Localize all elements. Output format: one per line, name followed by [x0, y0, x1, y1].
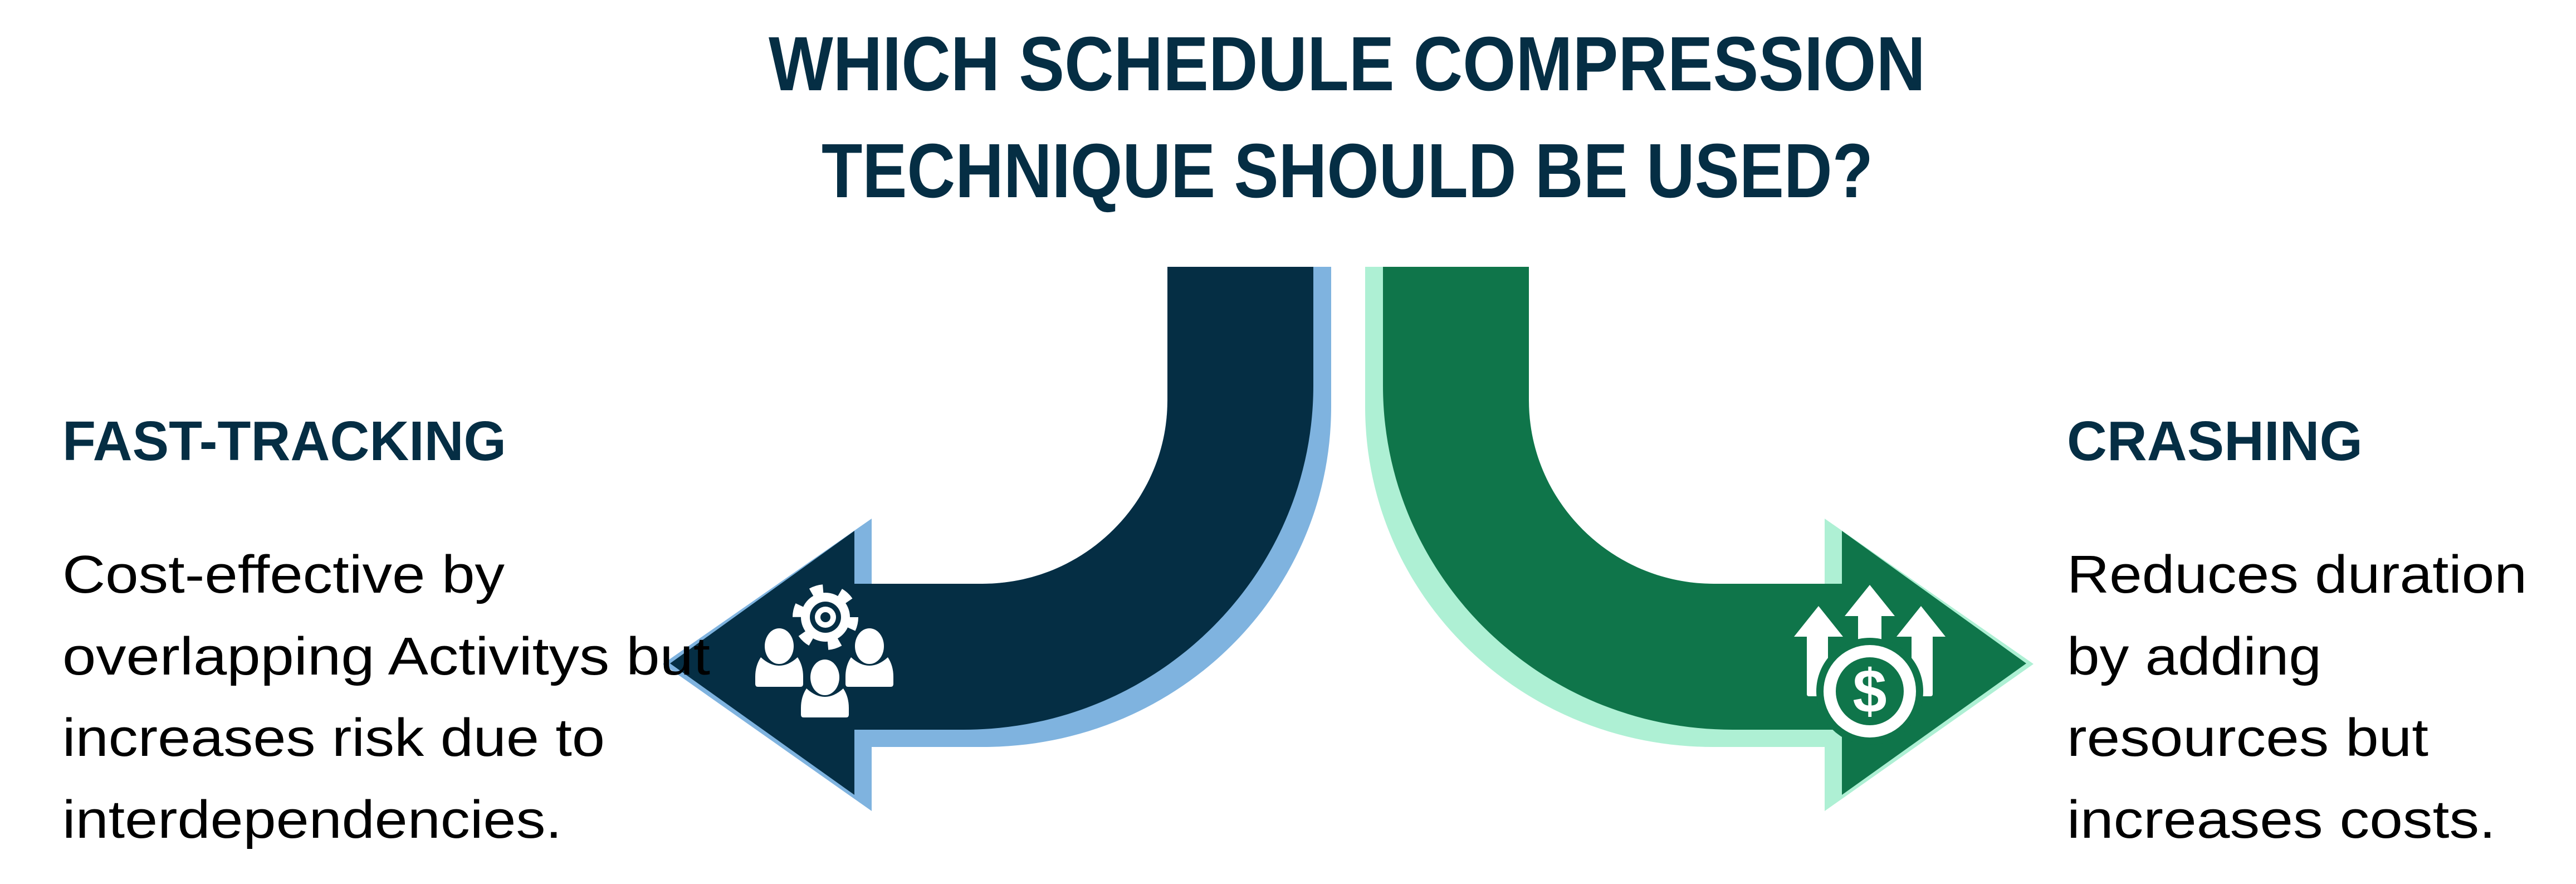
text: crashing description: Reduces duration: [2067, 545, 2527, 604]
text: fast-tracking description: overlapping Activitys but: [62, 627, 710, 686]
text: crashing description: by adding: [2067, 627, 2321, 686]
text: fast-tracking description: increases risk due to: [62, 708, 605, 768]
arrow: crashing (right, green): [1365, 267, 2034, 811]
text: crashing description: [2067, 545, 2527, 849]
arrow: fast-tracking (left, navy): [663, 267, 1331, 811]
text: fast-tracking description: interdependencies.: [62, 790, 562, 849]
heading: fast-tracking: FAST-TRACKING: [62, 410, 506, 472]
title: [769, 21, 1925, 214]
text: fast-tracking description: Cost-effective by: [62, 545, 505, 604]
title: TECHNIQUE SHOULD BE USED?: [822, 128, 1873, 214]
text: crashing description: resources but: [2067, 708, 2428, 768]
text: fast-tracking description: [62, 545, 710, 849]
icon: money with up arrows: $: [1852, 657, 1887, 726]
icon: team with gear: [755, 589, 893, 717]
icon: money with up arrows: [1794, 585, 1946, 745]
title: WHICH SCHEDULE COMPRESSION: [769, 21, 1925, 107]
heading: crashing: CRASHING: [2067, 410, 2363, 472]
text: crashing description: increases costs.: [2067, 790, 2496, 849]
